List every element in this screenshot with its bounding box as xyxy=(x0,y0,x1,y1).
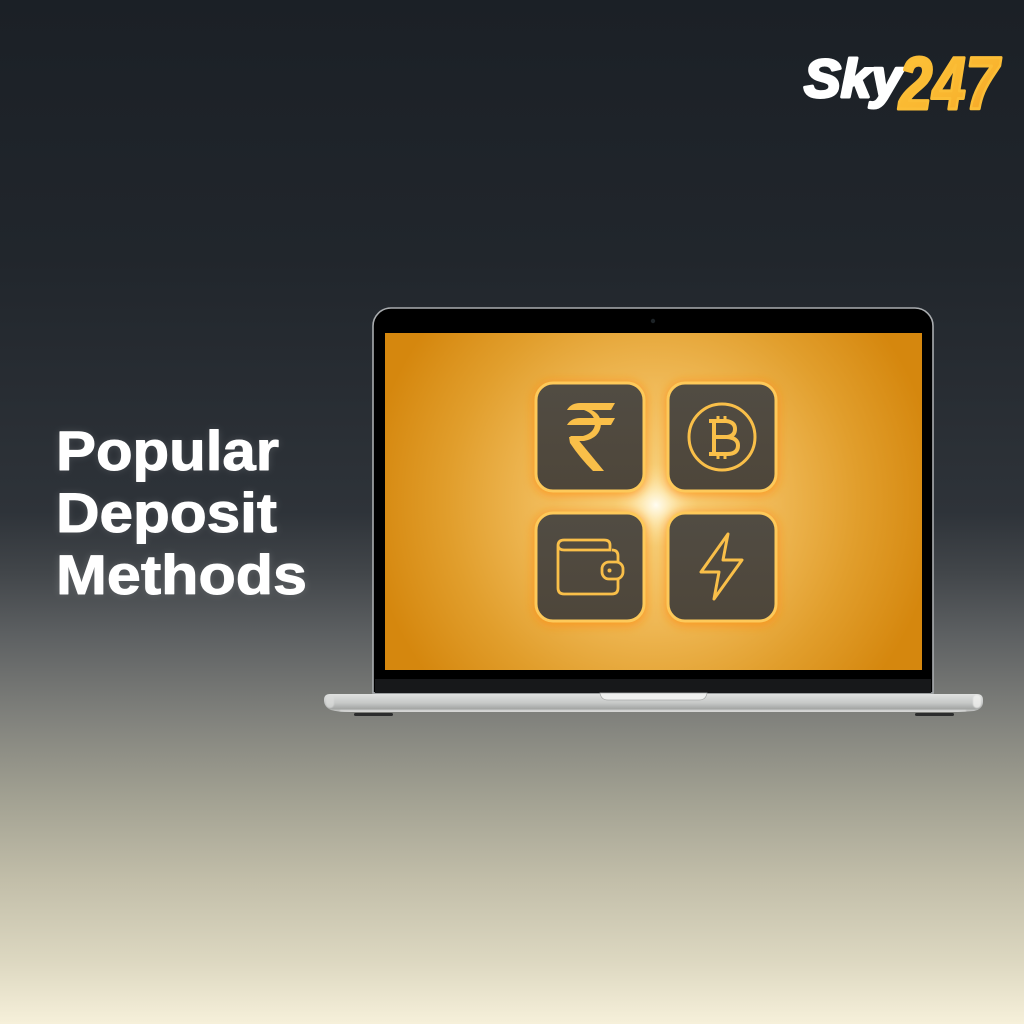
icon: rupee xyxy=(567,403,615,471)
heading: Popular Deposit Methods: Popular xyxy=(55,419,280,482)
webcam xyxy=(651,319,655,323)
laptop lid xyxy=(373,308,933,693)
lower bezel xyxy=(375,679,931,693)
base end highlights xyxy=(326,695,334,708)
heading: Popular Deposit Methods: Deposit xyxy=(55,481,278,544)
logo: Sky247: Sky xyxy=(804,49,905,109)
tile: wallet xyxy=(533,511,647,626)
logo: Sky247: 247 xyxy=(897,42,1002,125)
heading: Popular Deposit Methods: Deposit xyxy=(56,481,277,544)
centre glow xyxy=(614,463,698,547)
lower edge highlight xyxy=(340,710,966,712)
screen xyxy=(385,333,922,670)
laptop base xyxy=(324,693,983,716)
trackpad notch xyxy=(600,693,707,700)
heading: Popular Deposit Methods: Methods xyxy=(56,543,307,606)
left foot xyxy=(354,713,393,716)
tile: rupee xyxy=(533,381,647,496)
laptop xyxy=(324,308,983,716)
logo: Sky247 xyxy=(804,42,1002,125)
heading: Popular Deposit Methods xyxy=(55,419,308,606)
icon: wallet xyxy=(558,540,623,594)
right foot xyxy=(915,713,954,716)
icon: lightning xyxy=(701,534,742,599)
icon: bitcoin xyxy=(689,404,755,470)
tile: bitcoin xyxy=(665,381,779,496)
tile: lightning xyxy=(665,511,779,626)
heading: Popular Deposit Methods: Methods xyxy=(55,543,308,606)
heading: Popular Deposit Methods: Popular xyxy=(56,419,279,482)
